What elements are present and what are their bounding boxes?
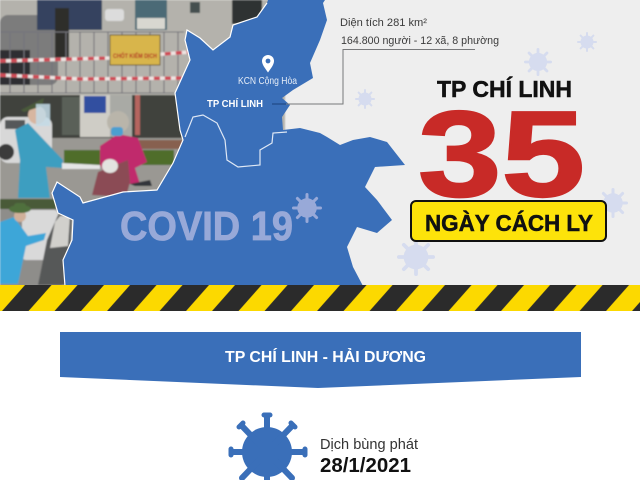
parked car left — [0, 15, 58, 85]
hazard stripe band — [0, 285, 640, 311]
bottom-left photo — [0, 199, 72, 286]
map: Hải Dương blue shape — [52, 0, 405, 286]
area and population text: Diện tích 281 km² — [340, 17, 427, 29]
map: white photo edge — [52, 3, 267, 286]
COVID 19 map label: COVID 19 — [120, 203, 293, 249]
decorative pale viruses — [356, 33, 626, 274]
hedge — [64, 150, 174, 165]
top background panel — [0, 0, 640, 286]
white truck — [135, 0, 167, 30]
checkpoint sign — [110, 35, 160, 65]
blue truck — [37, 0, 102, 30]
small white car — [105, 9, 124, 21]
warning tape — [0, 52, 190, 79]
outbreak date text: 28/1/2021 — [320, 455, 411, 477]
metal fence — [0, 32, 184, 93]
white car behind officer — [0, 117, 52, 163]
outbreak date text — [320, 436, 419, 477]
badge: quarantine days — [411, 201, 606, 241]
label: KCN Cộng Hòa: KCN Cộng Hòa — [238, 75, 297, 87]
icon: large virus — [231, 415, 305, 480]
officer in blue suit — [15, 98, 100, 198]
person behind fence — [55, 8, 69, 60]
area and population text — [340, 17, 499, 47]
woman on scooter — [92, 111, 152, 197]
banner — [60, 332, 581, 388]
area and population text: 164.800 người - 12 xã, 8 phường — [341, 35, 499, 47]
banner: TP CHÍ LINH - HẢI DƯƠNG — [225, 347, 426, 366]
icon: virus on COVID label — [294, 194, 320, 222]
icon: location pin — [262, 55, 274, 72]
photo collage: checkpoint scene — [0, 0, 285, 286]
big number 35: 35 — [418, 86, 585, 222]
label: TP Chí Linh on map: TP CHÍ LINH — [207, 97, 263, 110]
building storefront — [0, 95, 184, 138]
badge: quarantine days: NGÀY CÁCH LY — [425, 209, 593, 236]
heading: TP Chí Linh: TP CHÍ LINH — [437, 75, 572, 102]
dark van top — [190, 2, 200, 13]
map: district border — [185, 115, 287, 167]
leader line to statistics — [272, 50, 475, 104]
lower white background — [0, 311, 640, 480]
checkpoint sign: CHỐT KIỂM DỊCH — [113, 50, 157, 60]
map of Chí Linh region — [52, 0, 405, 286]
outbreak date text: Dịch bùng phát — [320, 436, 419, 453]
